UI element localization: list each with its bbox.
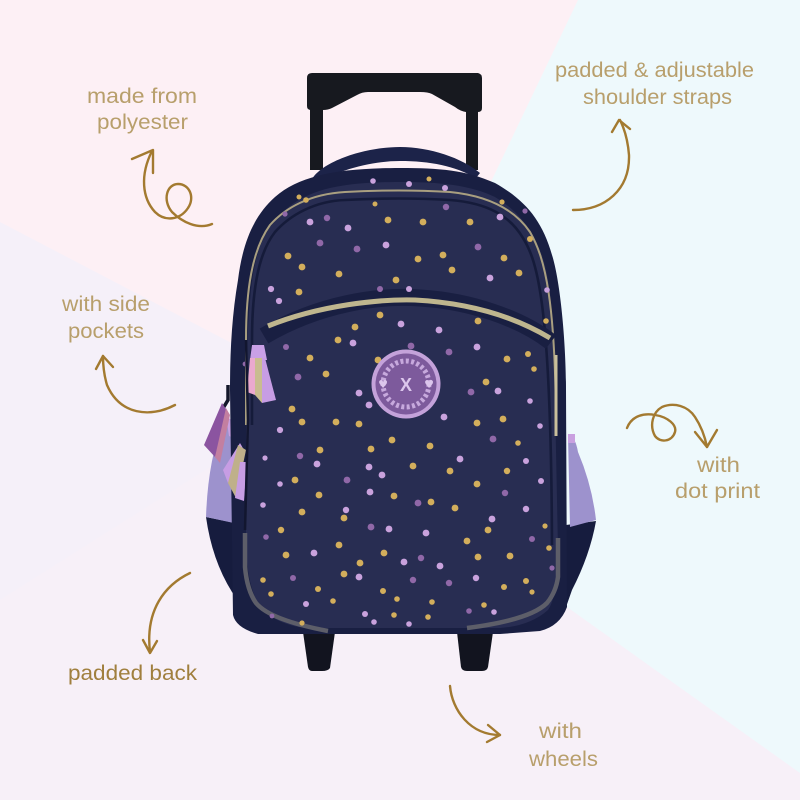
label: with side pockets: with side (61, 292, 150, 316)
polka dots light purple (260, 178, 550, 627)
round logo patch: X (400, 375, 412, 395)
telescopic trolley handle (307, 73, 482, 170)
label: with side pockets: pockets (68, 319, 144, 343)
label: with dot print: with (696, 453, 740, 477)
top carry handle (310, 147, 480, 185)
label: with dot print: dot print (675, 479, 760, 503)
front pocket seam (264, 297, 551, 342)
side mesh pockets (206, 423, 596, 527)
right zipper highlight (554, 355, 558, 436)
round logo patch (372, 350, 440, 418)
arrow: polyester curl (132, 150, 212, 226)
arrow: dot print curl (627, 405, 717, 447)
arrow: side pockets (96, 356, 175, 412)
label: with wheels: wheels (528, 747, 598, 771)
main zipper (246, 190, 556, 436)
upper tassel (247, 345, 276, 403)
pocket trims (226, 416, 575, 443)
label: made from polyester: made from (87, 84, 197, 108)
label: with side pockets (61, 292, 150, 343)
label: padded and adjustable shoulder straps: padded & adjustable (555, 58, 754, 82)
lower left tassels (204, 403, 247, 501)
front fabric panel (246, 182, 558, 628)
label: with dot print (675, 453, 760, 503)
wheels (303, 632, 493, 671)
backpack (204, 73, 596, 671)
arrow: wheels (450, 686, 500, 742)
label: made from polyester (87, 84, 197, 134)
round logo patch: ♥ (378, 378, 388, 391)
main zip flap (252, 198, 552, 545)
label: padded back: padded back (68, 661, 197, 685)
dark side strap (245, 340, 248, 530)
arrow: padded back (143, 573, 190, 653)
label: padded and adjustable shoulder straps (555, 58, 754, 109)
background: pink lower band (0, 410, 800, 800)
background: pale blue right (420, 0, 800, 773)
side wings (206, 517, 596, 610)
polka dots dark purple (243, 204, 555, 618)
label: made from polyester: polyester (97, 110, 188, 134)
main body (230, 168, 567, 634)
background: lavender lower left (0, 222, 800, 800)
front pocket zipper (268, 300, 550, 338)
label: with wheels: with (538, 719, 582, 743)
bottom trim (245, 533, 558, 631)
label: padded and adjustable shoulder straps: shoulder straps (583, 85, 732, 109)
zip puller (222, 385, 228, 410)
label: with wheels (528, 719, 598, 771)
round logo patch: ♥ (424, 378, 434, 391)
arrow: shoulder straps (573, 120, 630, 210)
polka dots gold (260, 176, 552, 626)
